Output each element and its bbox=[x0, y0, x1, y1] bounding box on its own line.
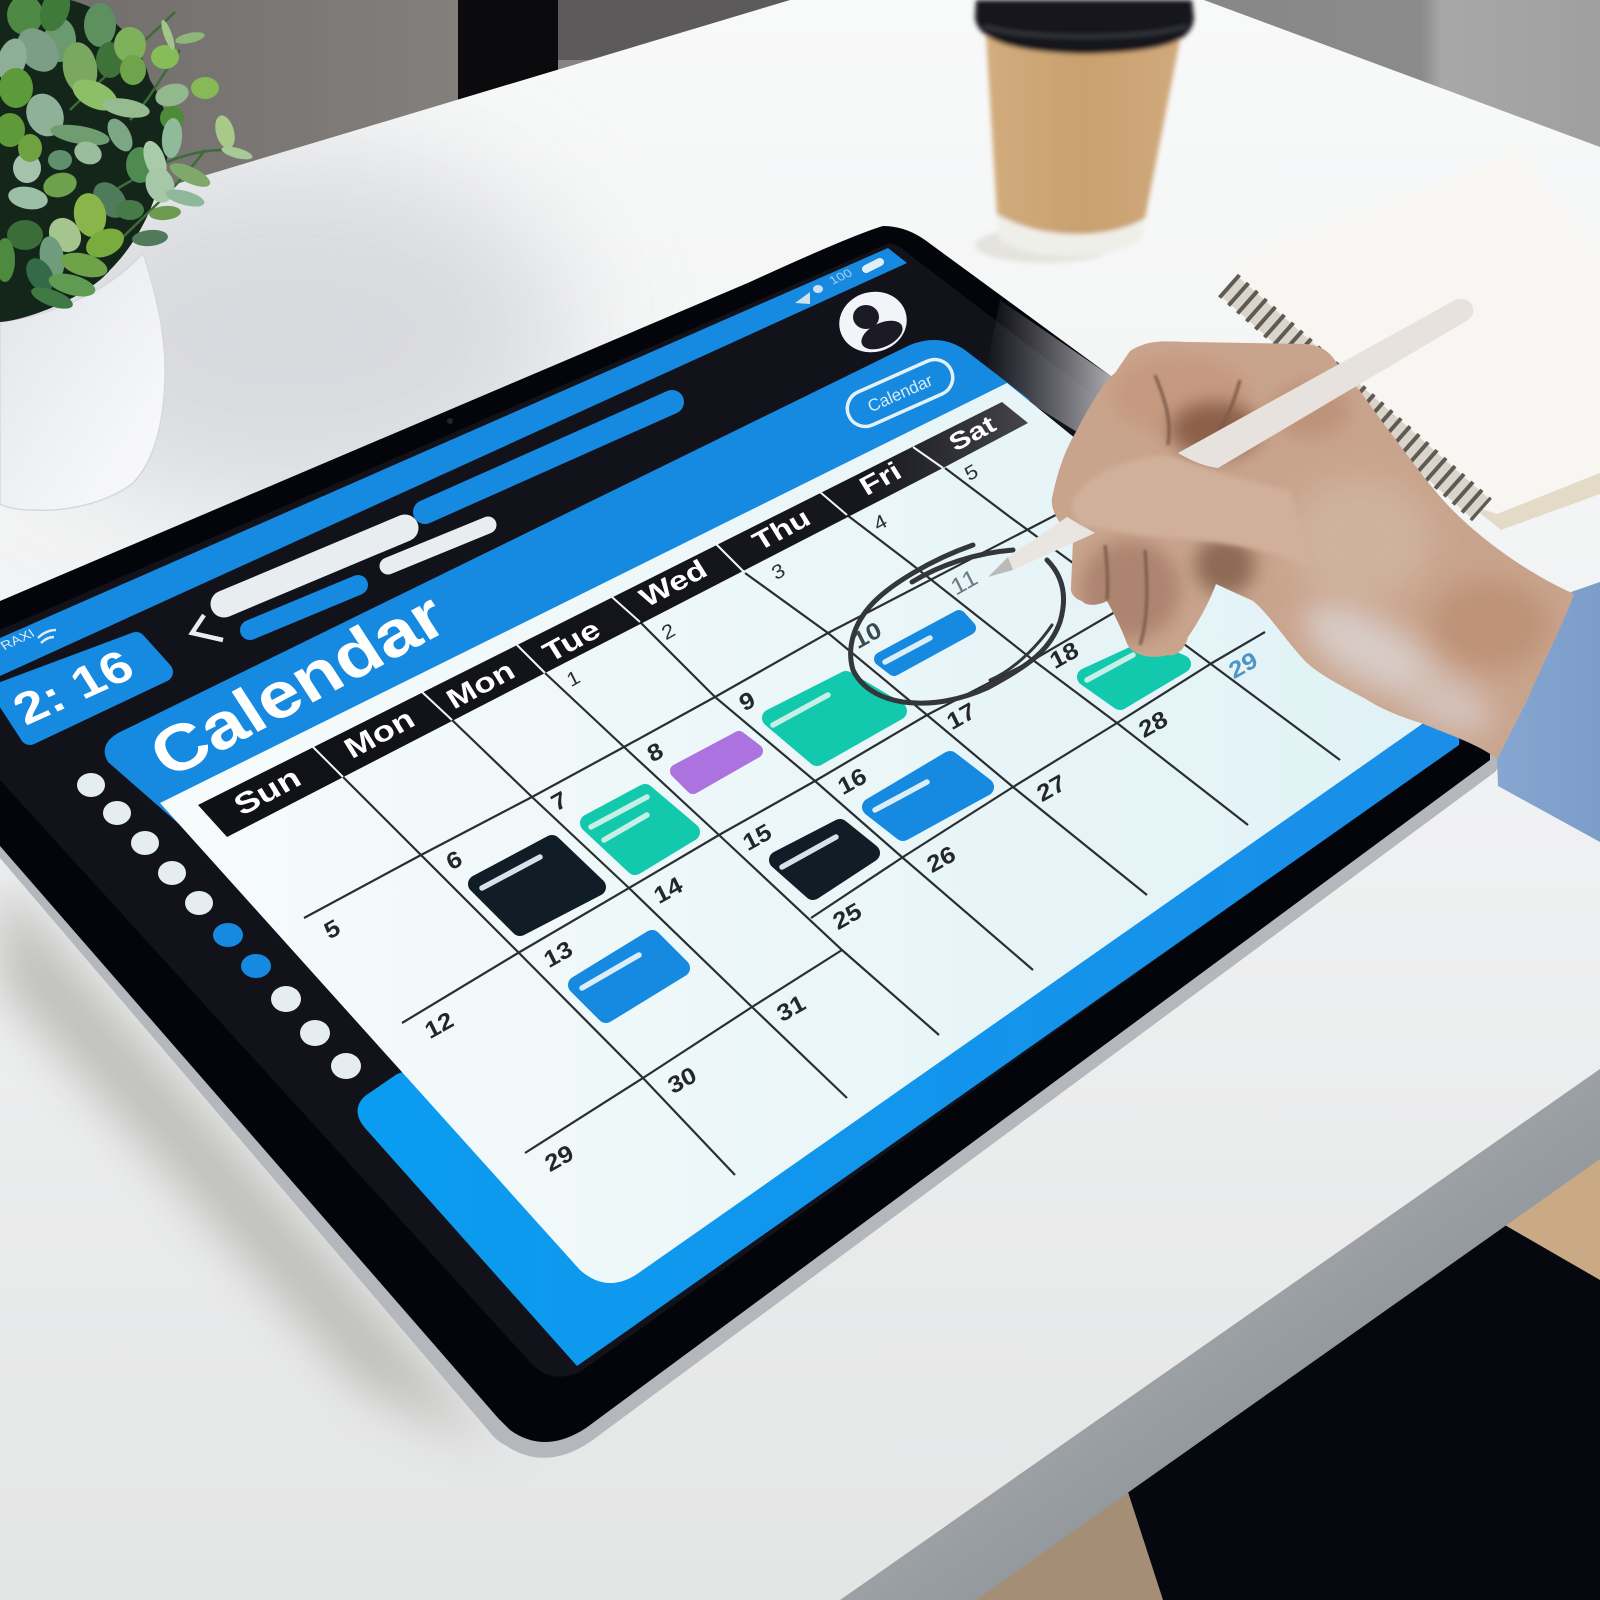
event: teal 9 bbox=[771, 680, 898, 757]
date numbers bbox=[320, 460, 1262, 1177]
event: blue 16 bbox=[871, 760, 985, 832]
date numbers: 5 bbox=[961, 460, 982, 486]
back chevron bbox=[192, 615, 223, 640]
tablet display dark area bbox=[0, 244, 1470, 1377]
date numbers: 27 bbox=[1033, 770, 1070, 807]
pen lower barrel bbox=[988, 517, 1095, 577]
date numbers: 8 bbox=[643, 738, 668, 768]
weekday header band: Fri bbox=[854, 457, 907, 501]
date numbers: 10 bbox=[849, 617, 886, 654]
battery icon bbox=[866, 262, 880, 269]
plant foliage bbox=[0, 0, 254, 322]
weekday header band: Sat bbox=[944, 410, 1001, 456]
profile avatar bbox=[832, 284, 914, 360]
date numbers: 9 bbox=[735, 687, 759, 717]
hand shading bbox=[1080, 355, 1550, 747]
date numbers: 29 bbox=[1225, 647, 1262, 684]
weekday header band: Tue bbox=[537, 613, 606, 668]
side dots bbox=[77, 773, 361, 1079]
date numbers: 16 bbox=[834, 763, 871, 800]
event: purple 8 bbox=[677, 738, 756, 787]
calendar sheet bbox=[160, 383, 1425, 1283]
date numbers: 26 bbox=[923, 841, 960, 878]
thumb bbox=[1072, 455, 1310, 566]
weekday header band: Mon bbox=[440, 654, 520, 715]
plant pot bbox=[0, 253, 165, 510]
weekday header band: Mon bbox=[338, 703, 420, 764]
cup base bbox=[996, 205, 1146, 256]
hand-drawn circle bbox=[851, 545, 1064, 703]
calendar title: Calendar bbox=[136, 578, 459, 791]
date numbers: 17 bbox=[943, 698, 980, 735]
cup lid bbox=[975, 0, 1194, 54]
blue short bar bbox=[250, 585, 358, 630]
spiral binding bbox=[1228, 285, 1482, 510]
tablet bbox=[0, 226, 1500, 1458]
white short bar bbox=[388, 525, 488, 566]
hand bbox=[988, 299, 1574, 759]
date numbers: 14 bbox=[650, 872, 687, 909]
cup shadow bbox=[975, 227, 1115, 263]
cup body bbox=[986, 36, 1180, 234]
battery label: 100 bbox=[826, 266, 855, 287]
event: blue 13 bbox=[577, 939, 681, 1014]
event: teal 7 bbox=[589, 793, 691, 866]
table front edge bbox=[840, 1069, 1600, 1600]
calendar grid lines bbox=[304, 468, 1340, 1175]
background wall bbox=[0, 0, 1600, 260]
date numbers: 31 bbox=[773, 990, 810, 1027]
date numbers: 30 bbox=[664, 1062, 701, 1099]
date numbers: 11 bbox=[947, 565, 982, 601]
status bar bbox=[0, 248, 907, 676]
tablet soft shadow bbox=[0, 875, 560, 1480]
event: blue 10 bbox=[881, 617, 969, 669]
notebook thickness bbox=[1470, 473, 1600, 530]
tablet black bezel bbox=[0, 226, 1490, 1442]
date numbers: 3 bbox=[768, 559, 789, 585]
table left tone bbox=[10, 150, 570, 510]
weekday header band: Thu bbox=[747, 503, 816, 557]
lid ridge highlight bbox=[984, 26, 1186, 36]
event: teal 18 bbox=[1086, 649, 1182, 701]
time badge: 2: 16 bbox=[4, 640, 143, 734]
date numbers: 1 bbox=[563, 666, 584, 692]
calendar header panel bbox=[105, 340, 1030, 825]
bottom blue panel bbox=[358, 724, 1459, 1366]
white bar bbox=[224, 528, 405, 604]
notebook bbox=[1222, 150, 1600, 530]
date numbers: 4 bbox=[870, 510, 891, 536]
date numbers: 6 bbox=[442, 846, 466, 876]
date numbers: 7 bbox=[547, 787, 571, 817]
date numbers: 28 bbox=[1135, 706, 1172, 743]
date numbers: 25 bbox=[829, 898, 866, 935]
coffee cup bbox=[975, 0, 1194, 263]
signal icon bbox=[795, 292, 810, 304]
date numbers: 29 bbox=[541, 1140, 578, 1177]
calendar button: Calendar bbox=[865, 371, 936, 416]
wifi icon bbox=[38, 630, 56, 643]
bezel reflection near hand bbox=[985, 300, 1112, 440]
shirt cuff bbox=[1497, 582, 1600, 842]
weekday header band: Wed bbox=[634, 553, 713, 613]
calendar button bbox=[842, 354, 958, 432]
blue long bar bbox=[425, 402, 672, 512]
date numbers: 18 bbox=[1046, 637, 1083, 674]
date numbers: 2 bbox=[658, 619, 679, 645]
event: black 15 bbox=[778, 828, 871, 891]
notebook page bbox=[1222, 150, 1600, 514]
weekday header band bbox=[198, 402, 1028, 837]
camera dot bbox=[447, 418, 453, 424]
date numbers: 12 bbox=[421, 1007, 458, 1044]
tablet silver frame bbox=[0, 226, 1500, 1458]
date numbers: 15 bbox=[739, 819, 776, 856]
pen upper barrel bbox=[1178, 299, 1473, 468]
hand base bbox=[1052, 341, 1574, 759]
date numbers: 13 bbox=[540, 936, 577, 973]
weekday labels: Sun bbox=[228, 762, 307, 822]
wifi icon right bbox=[813, 285, 823, 293]
date numbers: 5 bbox=[320, 915, 345, 945]
placeholder bars bbox=[224, 402, 672, 630]
floor and chair below table bbox=[950, 1150, 1600, 1600]
event: black 6 bbox=[477, 844, 597, 927]
